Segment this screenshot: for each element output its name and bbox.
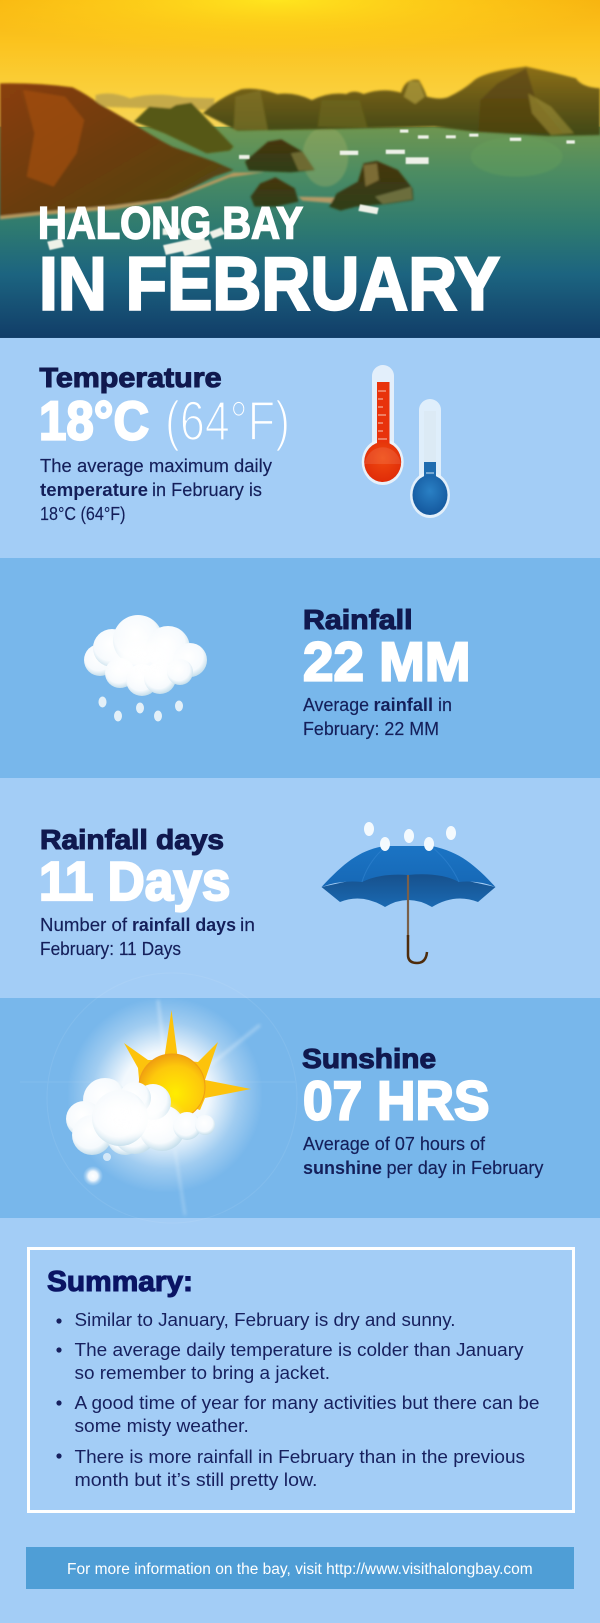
summary bullet list: some misty weather. xyxy=(74,1415,249,1436)
value: 64°F: (64°F) xyxy=(165,389,290,452)
icon: sun behind cloud xyxy=(20,973,297,1223)
sunshine description xyxy=(303,1133,544,1178)
summary bullet list: There is more rainfall in February than in the previous xyxy=(74,1446,525,1467)
temperature description: 18°C (64°F) xyxy=(40,503,126,524)
value: 18°C: 18°C xyxy=(39,390,149,452)
rainfall description: in xyxy=(438,694,452,715)
sunshine description: sunshine xyxy=(303,1157,382,1178)
temperature description xyxy=(40,455,273,524)
summary bullet list: Similar to January, February is dry and sunny. xyxy=(74,1309,456,1330)
title line: Halong Bay: HALONG BAY xyxy=(38,198,303,248)
heading: sunshine: Sunshine xyxy=(302,1043,436,1074)
icon: rain drops xyxy=(98,696,183,722)
rainfall days description: February: 11 Days xyxy=(40,938,181,959)
panel: summary xyxy=(28,1248,574,1512)
sunshine description: per day in February xyxy=(386,1157,544,1178)
value: 22 MM: 22 MM xyxy=(303,630,470,692)
panel: rainfall days xyxy=(0,778,600,998)
icon: red thermometer xyxy=(362,365,404,485)
title line: In February: IN FEBRUARY xyxy=(39,242,500,326)
summary bullet list: The average daily temperature is colder than January xyxy=(74,1339,524,1360)
title xyxy=(38,198,500,326)
heading: rainfall days: Rainfall days xyxy=(40,824,224,855)
summary bullet list xyxy=(56,1309,540,1490)
panel: sunshine xyxy=(0,973,600,1223)
rainfall days description: Number of xyxy=(40,914,128,935)
value: 07 hrs: 07 HRS xyxy=(303,1070,490,1132)
icon: drops on umbrella xyxy=(364,822,456,851)
temperature description: temperature xyxy=(40,479,148,500)
rainfall days description xyxy=(40,914,255,959)
rainfall days description: rainfall days xyxy=(132,914,236,935)
footer bar xyxy=(26,1547,574,1589)
value: 11 days: 11 Days xyxy=(39,850,230,912)
summary bullet list: so remember to bring a jacket. xyxy=(74,1362,330,1383)
summary bullet list: A good time of year for many activities but there can be xyxy=(74,1392,540,1413)
rainfall description: Average xyxy=(303,694,369,715)
heading: rainfall: Rainfall xyxy=(303,604,412,635)
temperature description: in February is xyxy=(152,479,262,500)
summary bullet list: month but it’s still pretty low. xyxy=(74,1469,318,1490)
panel: temperature xyxy=(0,338,600,558)
rainfall description: February: 22 MM xyxy=(303,718,439,739)
panel: rainfall xyxy=(0,558,600,778)
heading: temperature: Temperature xyxy=(40,362,222,393)
rainfall description xyxy=(303,694,452,739)
hero photo: Halong Bay at sunset xyxy=(0,0,600,338)
footer link text: For more information on the bay, visit http://www.visithalongbay.com xyxy=(67,1561,533,1578)
rainfall description: rainfall xyxy=(374,694,433,715)
icon: rain cloud xyxy=(84,615,207,722)
icon: blue thermometer xyxy=(410,399,450,518)
rainfall days description: in xyxy=(240,914,255,935)
icon: umbrella xyxy=(322,822,496,963)
heading: summary: Summary: xyxy=(47,1266,193,1298)
sunshine description: Average of 07 hours of xyxy=(303,1133,486,1154)
temperature description: The average maximum daily xyxy=(40,455,273,476)
